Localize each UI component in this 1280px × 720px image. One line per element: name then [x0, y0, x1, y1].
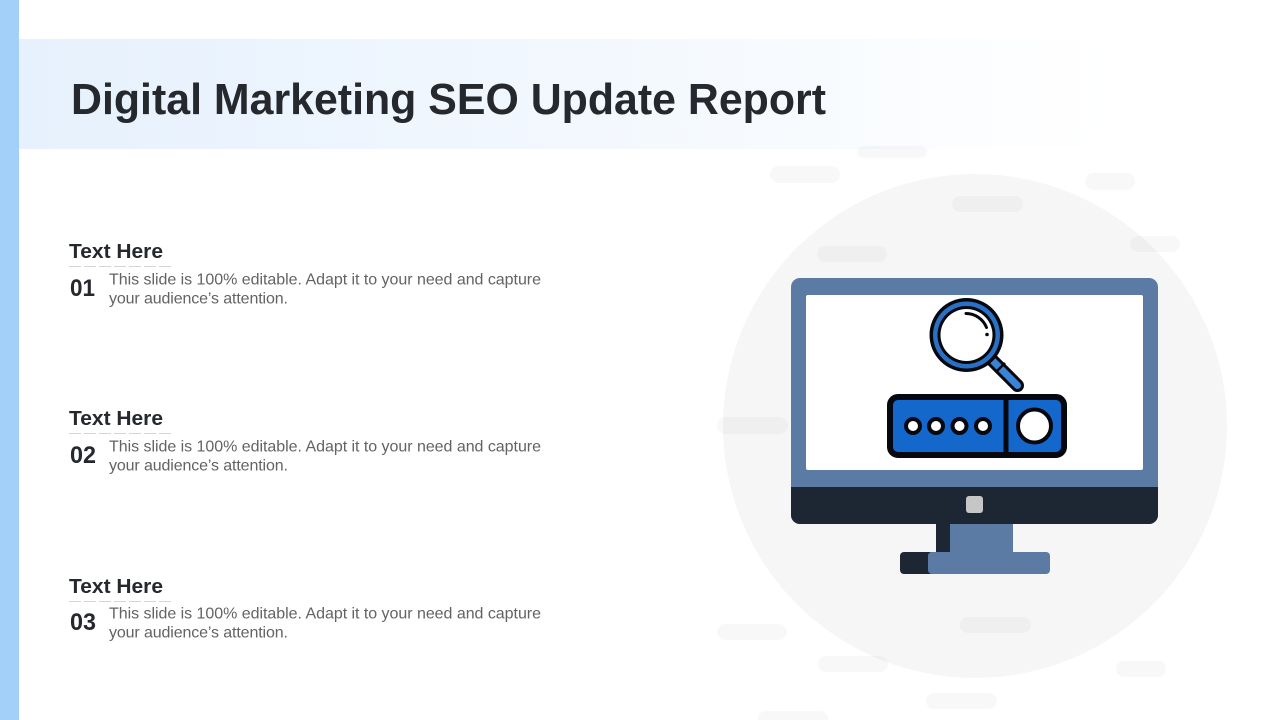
- item 01: [69, 240, 541, 308]
- item 03 heading: Text Here: [69, 575, 163, 598]
- item 01 heading: Text Here: [69, 240, 163, 263]
- item 03 number: 03: [70, 609, 96, 636]
- background circle: [723, 174, 1227, 678]
- item 01 number: 01: [70, 275, 95, 302]
- monitor screen: [806, 295, 1143, 470]
- item 01 description: This slide is 100% editable. Adapt it to your need and capture: [109, 272, 541, 288]
- item 03: [69, 575, 541, 642]
- item 02: [69, 407, 541, 474]
- item 01 description: your audience’s attention.: [109, 290, 288, 308]
- monitor body: [791, 278, 1158, 524]
- left accent bar: [0, 0, 19, 720]
- icon: magnifying glass: [930, 298, 1018, 386]
- title: Digital Marketing SEO Update Report: [71, 75, 826, 124]
- background clouds: [717, 146, 1180, 720]
- monitor stand: [936, 520, 950, 554]
- item 02 number: 02: [70, 442, 96, 469]
- item 02 description: This slide is 100% editable. Adapt it to your need and capture: [109, 438, 541, 456]
- item 02 heading: Text Here: [69, 407, 163, 430]
- title banner: [19, 39, 1109, 149]
- item 03 description: your audience’s attention.: [109, 624, 288, 642]
- monitor power button: [966, 496, 983, 513]
- monitor: [791, 278, 1158, 574]
- item 02 description: your audience’s attention.: [109, 458, 288, 474]
- item 03 description: This slide is 100% editable. Adapt it to your need and capture: [109, 606, 541, 622]
- icon: search bar device: [890, 396, 1064, 456]
